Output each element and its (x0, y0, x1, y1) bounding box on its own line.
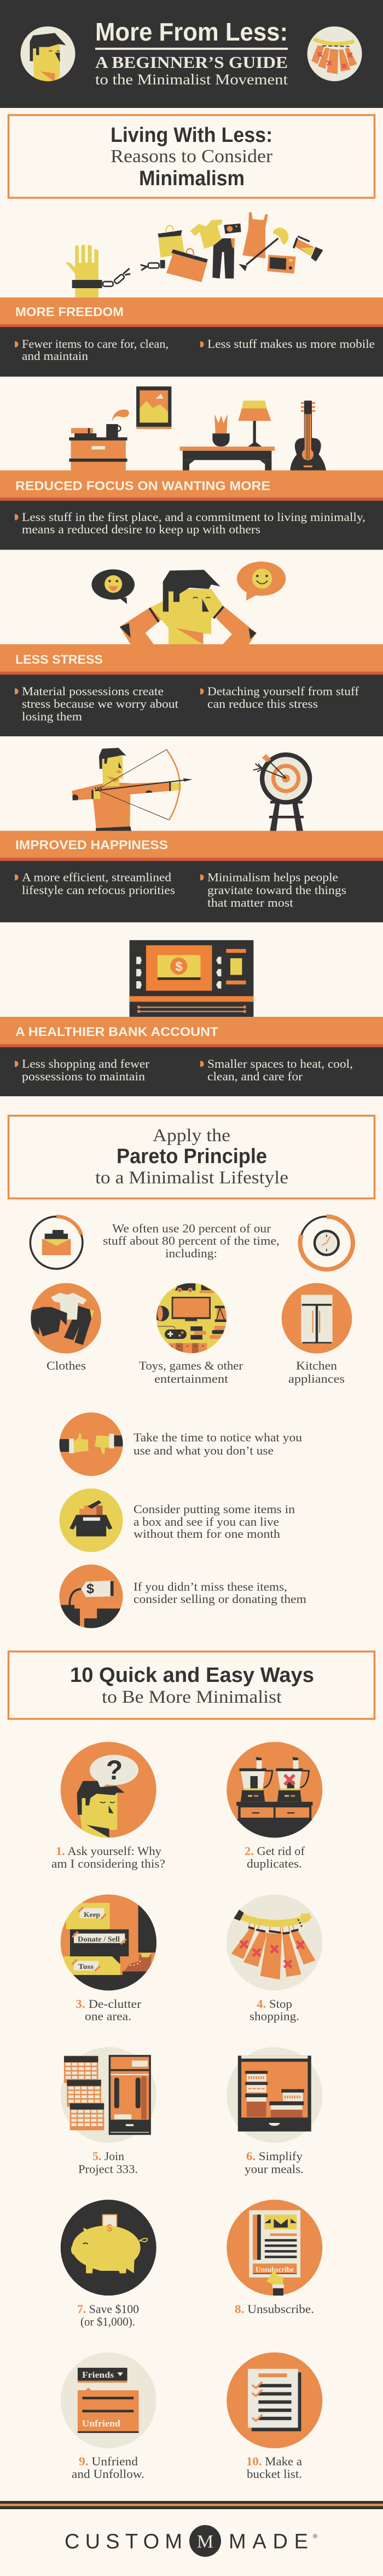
heading box: Pareto Principle: to a Minimalist Lifestyle (95, 1168, 288, 1188)
bullet: more mobile: Less stuff makes us more mobile (207, 337, 375, 351)
bullet: material possessions: stress because we worry about (22, 697, 178, 711)
way 10: make a bucket list: 10. Make a (246, 2454, 302, 2468)
way 7: save money piggy bank: 7. Save $100 (77, 2302, 139, 2316)
bullet: detaching yourself: can reduce this stress (207, 697, 318, 711)
heading box: 10 quick and easy ways: to Be More Minimalist (102, 1687, 282, 1707)
icon: 20 percent ring with drawer (30, 1217, 83, 1269)
way 1: ask yourself (51, 1742, 165, 1870)
bullet: smaller spaces: Smaller spaces to heat, cool, (207, 1057, 353, 1071)
tip: thumbs up and down: Take the time to notice what you (134, 1430, 302, 1444)
section: reduced focus on wanting more (0, 470, 383, 550)
title: to the Minimalist Movement (95, 71, 288, 88)
tip: thumbs up and down: use and what you don’t use (134, 1444, 274, 1457)
bullet: less stuff: means a reduced desire to keep up with others (22, 523, 260, 536)
labels: clothes, toys, kitchen: Toys, games & other (139, 1359, 243, 1372)
labels: clothes, toys, kitchen: Clothes (47, 1359, 86, 1372)
way 2: get rid of duplicates: 2. Get rid of (245, 1844, 305, 1858)
bullet: fewer items: and maintain (22, 349, 88, 363)
labels: clothes, toys, kitchen: appliances (288, 1372, 345, 1386)
way 3: de-clutter one area (60, 1894, 157, 2023)
text: 20 percent intro: stuff about 80 percent of the time, (103, 1234, 280, 1247)
way 5: join project 333 (61, 2047, 156, 2176)
way 3: de-clutter one area: one area. (85, 2010, 131, 2023)
tip: box of items: without them for one month (134, 1527, 280, 1541)
bullet: smaller spaces: clean, and care for (207, 1069, 303, 1083)
illustration: man with speech bubbles (91, 562, 286, 644)
bullet: material possessions: Material possessions create (22, 684, 164, 698)
way 7: save money piggy bank (61, 2200, 156, 2328)
logo: custom made: CUSTOM (65, 2530, 182, 2553)
logo: custom made (65, 2525, 317, 2557)
bullet: less shopping: possessions to maintain (22, 1069, 145, 1083)
tip: box of items: Consider putting some items in (134, 1502, 295, 1516)
way 8: unsubscribe (227, 2200, 322, 2316)
icon: kitchen appliance (282, 1283, 352, 1354)
way 1: ask yourself: 1. Ask yourself: Why (56, 1844, 161, 1858)
icon: price tags (307, 26, 362, 81)
icon: clothes (30, 1283, 101, 1354)
heading box: 10 quick and easy ways (9, 1651, 374, 1719)
logo: custom made: M (197, 2532, 213, 2552)
section: more freedom (0, 297, 383, 377)
illustration: archer and target (72, 748, 312, 831)
labels: clothes, toys, kitchen (47, 1359, 345, 1386)
way 8: unsubscribe: 8. Unsubscribe. (235, 2302, 314, 2316)
way 4: stop shopping: shopping. (249, 2010, 299, 2023)
way 3: de-clutter one area: Toss (78, 1963, 94, 1971)
way 3: de-clutter one area: Donate / Sell (78, 1936, 120, 1944)
bullet: material possessions (15, 684, 178, 723)
heading: improved happiness: IMPROVED HAPPINESS (15, 838, 168, 852)
section: improved happiness (0, 831, 383, 923)
bullet: gravitate: Minimalism helps people (207, 870, 338, 884)
heading box: Pareto Principle (9, 1115, 374, 1199)
way 5: join project 333: 5. Join (92, 2149, 124, 2163)
way 2: get rid of duplicates (227, 1742, 322, 1870)
heading: reduced focus: REDUCED FOCUS ON WANTING MORE (15, 479, 270, 493)
footer stripes (0, 2501, 383, 2509)
bullet: less stuff: Less stuff in the first place, and a commitment to living minimally, (22, 510, 365, 524)
bullet: gravitate: that matter most (207, 896, 293, 909)
way 9: unfriend and unfollow: 9. Unfriend (79, 2454, 138, 2468)
bullet: more efficient: lifestyle can refocus priorities (22, 883, 175, 897)
way 3: de-clutter one area: Keep (84, 1910, 100, 1919)
bullet: detaching yourself (200, 684, 359, 711)
way 10: make a bucket list (227, 2352, 322, 2481)
text: 20 percent intro: including: (165, 1246, 217, 1260)
way 9: unfriend and unfollow (61, 2352, 156, 2481)
way 1: ask yourself: am I considering this? (51, 1857, 165, 1870)
way 9: unfriend and unfollow: Friends (82, 2371, 114, 2380)
tip: thumbs up and down (59, 1412, 302, 1476)
way 4: stop shopping: 4. Stop (257, 1997, 292, 2011)
bullet: gravitate: gravitate toward the things (207, 883, 346, 897)
logo: custom made: ® (313, 2533, 317, 2540)
title: A BEGINNER’S GUIDE (95, 53, 288, 72)
logo: custom made: MADE (229, 2530, 308, 2553)
illustration: ATM with cash (130, 940, 253, 1017)
way 6: simplify your meals: 6. Simplify (246, 2149, 303, 2163)
bullet: smaller spaces (200, 1057, 353, 1083)
heading box: Pareto Principle: Pareto Principle (117, 1145, 267, 1168)
labels: clothes, toys, kitchen: Kitchen (296, 1359, 337, 1372)
tip: price tag on stairs (59, 1565, 306, 1628)
bullet: fewer items: Fewer items to care for, clean, (22, 337, 169, 351)
heading: healthier bank account: A HEALTHIER BANK ACCOUNT (15, 1024, 218, 1039)
way 9: unfriend and unfollow: Unfriend (82, 2418, 121, 2429)
heading box: Living With Less: Living With Less: (111, 124, 272, 147)
bullet: fewer items (15, 337, 169, 363)
text: 20 percent intro (103, 1222, 280, 1260)
way 1: ask yourself: ? (106, 1755, 123, 1785)
section: less stress (0, 644, 383, 736)
bullet: more efficient: A more efficient, streamlined (22, 870, 171, 884)
icon: man face (20, 26, 75, 82)
way 10: make a bucket list: bucket list. (247, 2467, 302, 2481)
illustration: broken chain and possessions (66, 212, 323, 297)
way 6: simplify your meals (227, 2047, 322, 2176)
heading box: Pareto Principle: Apply the (153, 1126, 230, 1146)
way 4: stop shopping (227, 1894, 322, 2023)
heading box: Living With Less (9, 115, 374, 198)
tip: price tag on stairs: consider selling or donating them (134, 1592, 306, 1606)
title (95, 18, 288, 88)
section: a healthier bank account (0, 1017, 383, 1096)
bullet: gravitate (200, 870, 346, 909)
way 7: save money piggy bank: $ (107, 2223, 113, 2234)
way 7: save money piggy bank: (or $1,000). (80, 2315, 135, 2328)
text: 20 percent intro: We often use 20 percent of our (112, 1222, 271, 1235)
way 8: unsubscribe: Unsubscribe (256, 2266, 294, 2274)
header banner (0, 0, 383, 108)
way 5: join project 333: Project 333. (78, 2162, 138, 2176)
heading: more freedom: MORE FREEDOM (15, 305, 124, 319)
bullet: material possessions: losing them (22, 709, 82, 723)
tip: price tag on stairs: If you didn’t miss these items, (134, 1580, 287, 1593)
way 3: de-clutter one area: 3. De-clutter (76, 1997, 142, 2011)
heading box: Living With Less: Minimalism (139, 167, 245, 190)
way 2: get rid of duplicates: duplicates. (247, 1857, 302, 1870)
heading box: 10 quick and easy ways: 10 Quick and Easy Ways (70, 1664, 314, 1687)
labels: clothes, toys, kitchen: entertainment (154, 1372, 228, 1386)
bullet: less shopping (15, 1057, 150, 1083)
tip: price tag on stairs: $ (86, 1581, 94, 1596)
heading: less stress: LESS STRESS (15, 652, 103, 666)
icon: toys and games (154, 1283, 228, 1354)
tip: box of items: a box and see if you can live (134, 1515, 279, 1529)
heading box: Living With Less: Reasons to Consider (111, 146, 273, 167)
tip: box of items (59, 1489, 295, 1552)
way 6: simplify your meals: your meals. (245, 2162, 304, 2176)
bullet: less stuff (15, 510, 365, 536)
way 9: unfriend and unfollow: and Unfollow. (72, 2467, 144, 2481)
illustration: ATM with cash: $ (175, 959, 183, 974)
bullet: detaching yourself: Detaching yourself from stuff (207, 684, 359, 698)
bullet: more efficient (15, 870, 175, 897)
bullet: less shopping: Less shopping and fewer (22, 1057, 150, 1071)
icon: 80 percent ring with clock (300, 1217, 353, 1269)
title: More From Less: (95, 18, 288, 46)
illustration: furniture and home items (69, 386, 326, 471)
